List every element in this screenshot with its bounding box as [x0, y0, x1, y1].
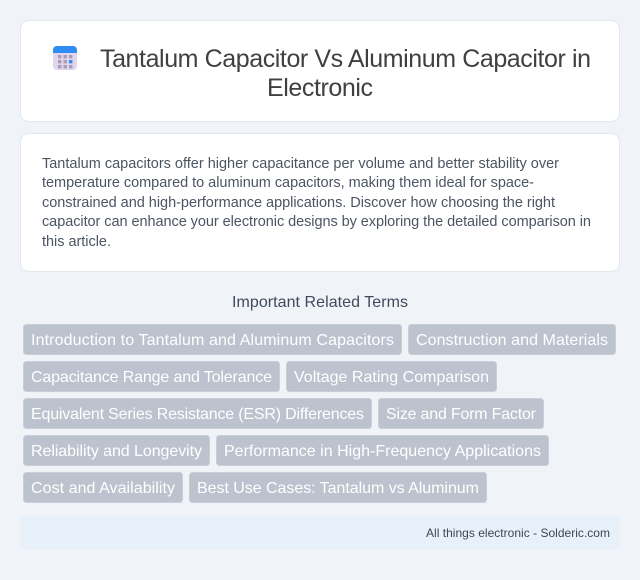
title: Tantalum Capacitor Vs Aluminum Capacitor in — [100, 45, 591, 73]
tag: best use cases: Best Use Cases: Tantalum vs Aluminum — [197, 480, 479, 497]
text block: description: constrained and high-performance applications. Discover how choosing the right — [42, 195, 555, 211]
panel: header — [20, 20, 620, 122]
tag: voltage: Voltage Rating Comparison — [294, 369, 489, 386]
tag: voltage — [286, 362, 496, 392]
icon: calendar — [53, 46, 77, 70]
tag: performance: Performance in High-Frequency Applications — [224, 443, 541, 460]
text block: description — [42, 156, 591, 250]
tag: esr: Equivalent Series Resistance (ESR) Differences — [31, 406, 364, 423]
tag: reliability — [24, 436, 210, 466]
heading: important related terms: Important Related Terms — [232, 294, 408, 311]
tag: reliability: Reliability and Longevity — [31, 443, 202, 460]
tag: best use cases — [190, 472, 486, 502]
tag: performance — [216, 436, 548, 466]
tag: size: Size and Form Factor — [386, 406, 537, 423]
title: Electronic — [267, 74, 373, 102]
tag: capacitance: Capacitance Range and Tolerance — [31, 369, 272, 386]
tag: esr — [24, 398, 372, 428]
tag: cost — [24, 472, 182, 502]
footer text: All things electronic - Solderic.com — [426, 526, 610, 540]
tag: introduction: Introduction to Tantalum and Aluminum Capacitors — [31, 332, 394, 349]
tag: size — [378, 398, 544, 428]
text block: description: Tantalum capacitors offer higher capacitance per volume and better stability over — [42, 156, 559, 172]
tag: cost: Cost and Availability — [31, 480, 175, 497]
text block: description: capacitor can enhance your electronic designs by exploring the detailed comparison in — [42, 214, 591, 230]
panel: description — [20, 134, 620, 272]
tag: construction — [408, 324, 616, 354]
title — [100, 45, 591, 102]
text block: description: this article. — [42, 234, 111, 250]
tag: capacitance — [24, 362, 280, 392]
tag: introduction — [24, 324, 402, 354]
footer — [20, 516, 620, 550]
tag list — [24, 324, 616, 502]
text block: description: temperature compared to aluminum capacitors, making them ideal for space- — [42, 175, 534, 191]
tag: construction: Construction and Materials — [416, 332, 608, 349]
